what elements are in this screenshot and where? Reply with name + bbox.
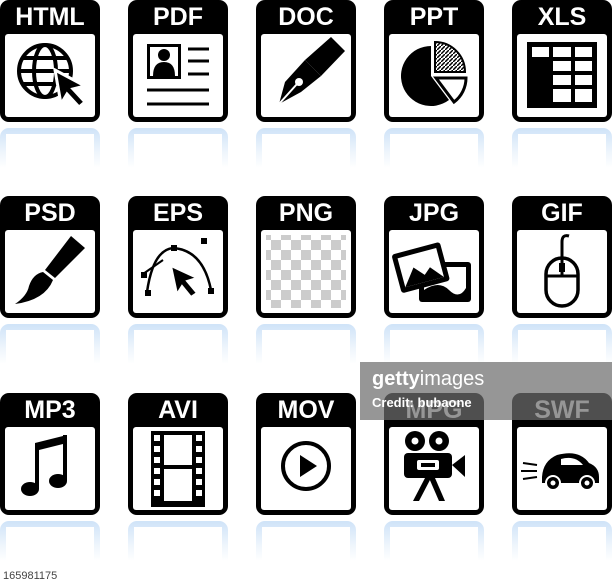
icon: XLS (512, 0, 612, 122)
icon: MOV: MOV (278, 396, 334, 424)
reflection row 3 (0, 521, 612, 554)
reflection row 1 (0, 128, 612, 160)
icon: MP3: MP3 (24, 396, 76, 424)
icon: MPG: MPG (406, 396, 462, 424)
icon: PPT: PPT (410, 3, 458, 31)
id label (0, 566, 73, 587)
icon: DOC (256, 0, 356, 122)
icon: PNG (256, 196, 356, 318)
icon: AVI: AVI (158, 396, 198, 424)
icon: EPS (128, 196, 228, 318)
icon: JPG (384, 196, 484, 318)
icon: PNG: PNG (279, 199, 333, 227)
icon: MOV (256, 393, 356, 515)
reflection row 2 (0, 324, 612, 356)
icon: PPT (384, 0, 484, 122)
icon: PSD: PSD (24, 199, 76, 227)
icon: PDF (128, 0, 228, 122)
icon: MPG (384, 393, 484, 515)
icon: XLS: XLS (538, 3, 586, 31)
icon: JPG: JPG (409, 199, 459, 227)
icon: AVI (128, 393, 228, 515)
watermark band (360, 362, 612, 420)
icon: HTML: HTML (15, 3, 85, 31)
icon: GIF (512, 196, 612, 318)
icon: DOC: DOC (278, 3, 334, 31)
credit text: Credit: bubaone (372, 395, 472, 410)
id label: 165981175 (3, 570, 57, 582)
icon: GIF: GIF (541, 199, 583, 227)
icon: EPS: EPS (153, 199, 203, 227)
icon: SWF (512, 393, 612, 515)
icon: PDF: PDF (153, 3, 203, 31)
icon: MP3 (0, 393, 100, 515)
icon: HTML (0, 0, 100, 122)
icon: SWF: SWF (534, 396, 590, 424)
icon: PSD (0, 196, 100, 318)
watermark text: gettyimages (372, 368, 484, 390)
